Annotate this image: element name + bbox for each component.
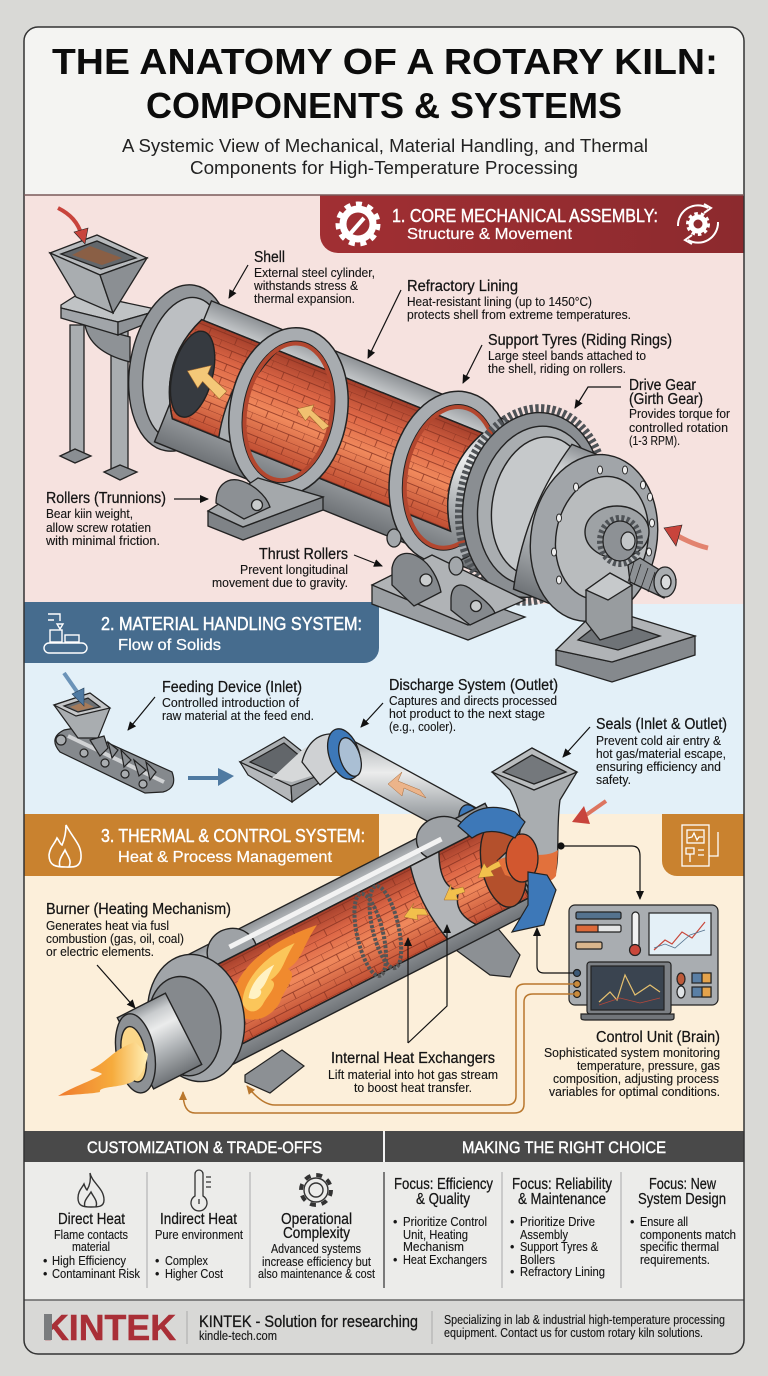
icon: thermometer [191,1170,211,1211]
label: Drive Gear [629,377,730,448]
panel: thermal and control [24,814,744,1131]
choice: Efficiency and Quality: & Quality [416,1191,470,1208]
option: Operational Complexity: Operational [281,1211,352,1228]
burner outer flame [58,1042,148,1096]
label: Shell: External steel cylinder, [254,266,375,280]
footer: company: kindle-tech.com [199,1329,277,1343]
label: Discharge System: Captures and directs processed [389,694,557,708]
label: Thrust Rollers: Thrust Rollers [259,546,348,563]
bar: lower section headings: MAKING THE RIGHT CHOICE [462,1138,666,1157]
choice: Efficiency and Quality: Prioritize Control [403,1215,487,1229]
choice: New System Design: Focus: New [649,1176,717,1193]
label: Discharge System: (e.g., cooler). [389,720,456,734]
option: Operational Complexity: Complexity [283,1225,350,1242]
header tab: control icon [662,814,744,876]
option: Indirect Heat: • [155,1267,159,1281]
label: Thrust Rollers: movement due to gravity. [212,576,348,590]
tyre: discharge side [384,389,518,566]
control unit [569,905,718,1020]
illustration: discharge chute pipe [302,725,490,851]
outlet [474,816,533,911]
icon: flame [78,1173,104,1207]
label: Burner: Generates heat via fusl [46,919,169,933]
label: Feeding Device: Controlled introduction of [162,696,300,710]
shell [178,803,539,1065]
label: Support Tyres: the shell, riding on rollers. [488,362,626,376]
icon: gear and wrench [338,204,378,244]
flow arrow: feed window [182,358,233,400]
label: Internal Heat Exchangers: Lift material into hot gas stream [328,1068,498,1082]
label: Discharge System: hot product to the next stage [389,707,545,721]
icon: rotation gear [678,204,718,244]
option: Indirect Heat: Higher Cost [165,1267,223,1281]
label: Seals: safety. [596,773,631,787]
choice: Efficiency and Quality: Heat Exchangers [403,1253,487,1267]
label: Shell: withstands stress & [253,279,359,293]
illustration: feed hopper and stand [50,235,160,480]
logo: KINTEK: KINTEK [43,1307,176,1348]
option: Indirect Heat: Indirect Heat [160,1211,238,1228]
label: Refractory Lining: Heat-resistant lining (up to 1450°C) [407,295,592,309]
chain exchanger [330,878,426,984]
footer: description: Specializing in lab & industrial high-temperature processing [444,1313,725,1327]
choice: New System Design: Ensure all [640,1215,688,1229]
bar: lower section headings: CUSTOMIZATION & TRADE-OFFS [87,1138,322,1157]
option: Indirect Heat [155,1170,243,1281]
illustration: discharge bin [240,737,330,802]
label: Shell: Shell [254,249,285,266]
choice: Reliability and Maintenance: • [510,1240,514,1254]
inner flame [214,923,343,1029]
connector: control to kiln [537,928,574,973]
choice: Efficiency and Quality: • [393,1215,397,1229]
option: Direct Heat: • [43,1254,47,1268]
label: Drive Gear: (1-3 RPM). [629,434,680,448]
interior bricks [188,824,530,1053]
arrow head cold air [572,806,590,824]
illustration: rotary kiln cutaway [79,237,657,641]
label: Internal Heat Exchangers: Internal Heat Exchangers [331,1050,495,1067]
option: Operational Complexity: increase efficiency but [262,1255,371,1269]
ring: feed end [116,277,244,459]
label: Drive Gear: Drive Gear [629,377,696,394]
label: Thrust Rollers: Prevent longitudinal [240,563,348,577]
choice: Reliability and Maintenance: & Maintenance [518,1191,606,1208]
footer dividers [187,1311,432,1344]
arrow head feed [74,228,88,244]
connector: control to flange [183,994,574,1113]
flow arrow: centre window [293,400,334,432]
label: Drive Gear: Provides torque for [629,407,730,421]
header: section 1: Structure & Movement [407,226,573,243]
dividers [147,1172,621,1288]
label: Shell: thermal expansion. [254,292,355,306]
label: Support Tyres: Support Tyres (Riding Rings) [488,332,672,349]
interior bricks [154,316,489,531]
label: Burner: or electric elements. [46,945,154,959]
arrow head air [664,525,682,546]
header: section 3 [24,814,379,876]
connector: control to burner [247,984,574,1105]
label: Refractory Lining: protects shell from extreme temperatures. [407,308,631,322]
bar: lower section headings [24,1131,744,1162]
label: Drive Gear: controlled rotation [629,421,728,435]
choice: Reliability and Maintenance: • [510,1215,514,1229]
drive motor base [556,558,695,682]
label: Rollers [45,490,166,548]
choice: Efficiency and Quality: Unit, Heating [403,1228,468,1242]
girth gear [445,397,620,613]
option: Indirect Heat: • [155,1254,159,1268]
arrow: feed input blue [64,673,80,696]
connector: stack to control [558,843,640,899]
label: Seals: Prevent cold air entry & [596,734,722,748]
end flange [517,444,671,632]
label: Control Unit: variables for optimal conditions. [549,1085,720,1099]
label: Internal Heat Exchangers: to boost heat transfer. [354,1081,472,1095]
choice: New System Design: System Design [638,1191,726,1208]
label: Support Tyres: Large steel bands attached to [488,349,646,363]
subtitle: Components for High-Temperature Processing [190,158,578,178]
option: Operational Complexity: Advanced systems [271,1242,361,1256]
choice: Reliability and Maintenance: Refractory Lining [520,1265,605,1279]
footer rule [24,1299,744,1301]
panel: material handling [24,604,744,814]
choice: Efficiency and Quality: Mechanism [403,1240,464,1254]
option: Direct Heat: • [43,1267,47,1281]
label: Refractory Lining [407,278,631,322]
footer: company [199,1312,418,1343]
footer: description [444,1313,725,1340]
title: COMPONENTS & SYSTEMS [146,85,622,126]
choice: New System Design: • [630,1215,634,1229]
panel: lower options [24,1162,744,1300]
icon: gear [301,1175,331,1205]
option: Operational Complexity [258,1175,375,1281]
choice: Reliability and Maintenance: Assembly [520,1228,569,1242]
label: Control Unit: temperature, pressure, gas [577,1059,720,1073]
header: section 1 [320,195,744,253]
arrow head blue [72,688,84,706]
panel: core mechanical assembly [24,195,744,604]
option: Direct Heat: material [72,1240,110,1254]
discharge body [504,441,626,611]
thrust roller base [372,529,525,640]
upper pipe highlight [229,839,442,947]
label: Feeding Device [162,679,314,723]
arrow: cold air [586,801,606,815]
option: Direct Heat: Direct Heat [58,1211,126,1228]
title [52,41,718,126]
pinion and motor [600,518,640,564]
header: section 2: 2. MATERIAL HANDLING SYSTEM: [101,614,362,634]
label: Thrust Rollers [212,546,348,590]
label: Feeding Device: Feeding Device (Inlet) [162,679,302,696]
label: Seals: ensuring efficiency and [596,760,721,774]
label: Refractory Lining: Refractory Lining [407,278,518,295]
panel: title area [24,27,744,195]
subtitle: A Systemic View of Mechanical, Material Handling, and Thermal [122,136,648,156]
tyre left [203,924,261,980]
label: Discharge System [389,677,558,734]
footer: company: KINTEK - Solution for researching [199,1312,418,1331]
icon: conveyor [44,614,87,653]
label: Rollers: Bear kiin weight, [46,507,133,521]
title: THE ANATOMY OF A ROTARY KILN: [52,41,718,82]
tyre right [413,812,472,865]
label: Control Unit: composition, adjusting process [553,1072,719,1086]
choice: Efficiency and Quality: Focus: Efficiency [394,1176,493,1193]
shell segment between feed window and middle tyre [214,340,278,446]
choice: Reliability and Maintenance: Support Tyres & [520,1240,599,1254]
label: Seals [596,716,727,787]
label: Rollers: with minimal friction. [45,534,160,548]
icon: flame outline [49,825,81,867]
label: Seals: hot gas/material escape, [596,747,726,761]
illustration: kiln supports section 3 [245,925,520,1093]
label: Rollers: Rollers (Trunnions) [46,490,166,507]
header: section 3: 3. THERMAL & CONTROL SYSTEM: [101,826,365,846]
label: Burner [46,901,231,959]
choice: New System Design: specific thermal [640,1240,719,1254]
header: section 2: Flow of Solids [118,637,221,654]
pointer arrows [97,265,621,1043]
label: Control Unit: Sophisticated system monitoring [544,1046,720,1060]
blue seal: lower [512,872,556,932]
burner flange [138,947,254,1089]
choice: Reliability and Maintenance: Prioritize Drive [520,1215,595,1229]
label: Discharge System: Discharge System (Outlet) [389,677,558,694]
label: Control Unit: Control Unit (Brain) [596,1029,720,1046]
option: Indirect Heat: Complex [165,1254,209,1268]
illustration: feed conveyor [54,693,174,793]
label: Rollers: allow screw rotatien [46,521,151,535]
header: section 2 [24,602,379,663]
label: Support Tyres [488,332,672,376]
panel: footer [24,1300,744,1354]
choice: Reliability and Maintenance: Focus: Reliability [512,1176,612,1193]
trend chart [649,913,711,955]
label: Burner: Burner (Heating Mechanism) [46,901,231,918]
header: section 3: Heat & Process Management [118,849,333,866]
label: Feeding Device: raw material at the feed end. [162,709,314,723]
choice: Efficiency and Quality [393,1176,493,1267]
option: Direct Heat: Contaminant Risk [52,1267,141,1281]
arrow: transfer blue [188,768,234,786]
nozzle [117,993,202,1089]
flow arrows section 3 [404,855,516,920]
kiln shell [154,301,582,592]
option: Indirect Heat: Pure environment [155,1228,243,1242]
choice: Reliability and Maintenance [510,1176,612,1279]
label: Shell [253,249,375,306]
option: Operational Complexity: also maintenance & cost [258,1267,375,1281]
label: Drive Gear: (Girth Gear) [629,391,703,408]
illustration: trunnion support [208,478,323,540]
footer: description: equipment. Contact us for custom rotary kiln solutions. [444,1326,703,1340]
tyre: middle [224,326,353,498]
label: Control Unit [544,1029,720,1099]
choice: Efficiency and Quality: • [393,1253,397,1267]
small dials [677,973,711,998]
label: Seals: Seals (Inlet & Outlet) [596,716,727,733]
subtitle [122,136,648,178]
choice: New System Design: components match [640,1228,736,1242]
choice: New System Design [630,1176,736,1267]
thermometer [630,912,640,956]
option: Direct Heat: High Efficiency [52,1254,127,1268]
blue seal: upper [458,807,525,838]
arrow: air input [668,530,708,548]
option: Direct Heat [43,1173,141,1281]
option: Direct Heat: Flame contacts [54,1228,128,1242]
label: Burner: combustion (gas, oil, coal) [46,932,184,946]
illustration: kiln section 3 [72,778,567,1130]
choice: New System Design: requirements. [640,1253,710,1267]
dark feed opening [163,327,223,422]
outlet stack hopper [492,748,577,883]
laptop [581,962,674,1020]
choice: Reliability and Maintenance: • [510,1265,514,1279]
label: Internal Heat Exchangers [328,1050,498,1095]
choice: Reliability and Maintenance: Bollers [520,1253,555,1267]
header: section 1: 1. CORE MECHANICAL ASSEMBLY: [392,206,658,226]
lifter baffle [406,852,476,941]
arrow: feed input [58,208,82,236]
